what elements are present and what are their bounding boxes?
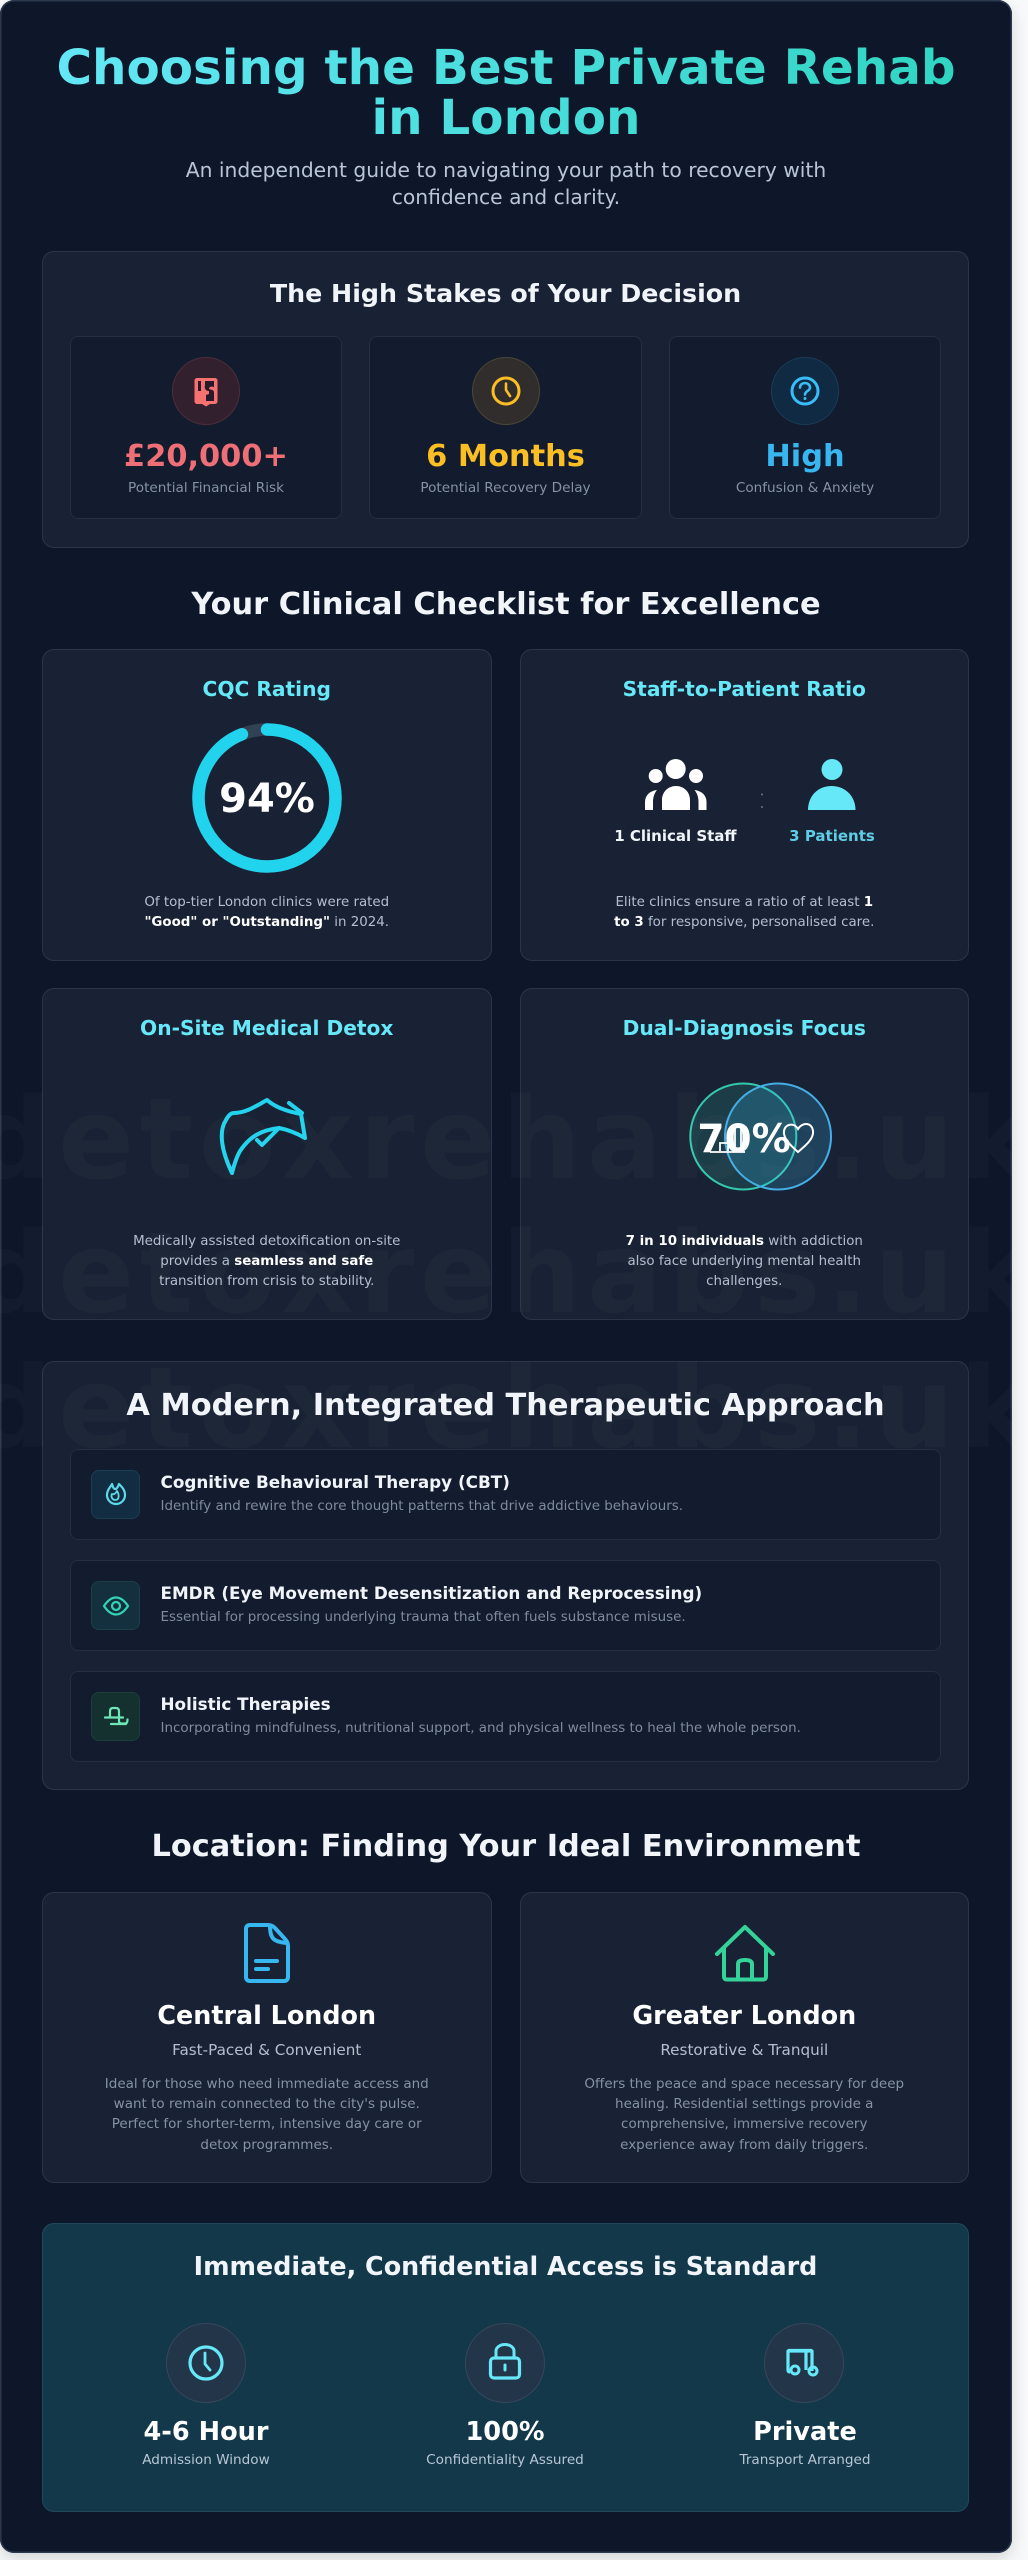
icon: patient xyxy=(808,759,856,810)
icon: holistic xyxy=(91,1692,140,1741)
location title: Greater London xyxy=(632,2000,856,2030)
item description: Essential for processing underlying trauma that often fuels substance misuse. xyxy=(160,1610,686,1625)
card heading: CQC Rating xyxy=(203,677,331,701)
therapy item: CBT xyxy=(70,1449,941,1540)
therapy item: holistic xyxy=(70,1671,941,1762)
subtitle xyxy=(186,158,826,209)
access icon: transport xyxy=(764,2323,844,2403)
icon: detox shape xyxy=(220,1098,307,1175)
location description: comprehensive, immersive recovery xyxy=(621,2116,867,2132)
item title: Holistic Therapies xyxy=(160,1694,331,1714)
heading: location: Location: Finding Your Ideal Environment xyxy=(152,1829,860,1864)
subtitle: An independent guide to navigating your path to recovery with xyxy=(186,158,826,182)
card description: also face underlying mental health xyxy=(627,1254,861,1269)
location description: Perfect for shorter-term, intensive day care or xyxy=(112,2116,422,2132)
card description: "Good" or "Outstanding" in 2024. xyxy=(144,915,389,930)
location description: Offers the peace and space necessary for deep xyxy=(584,2076,904,2092)
card description xyxy=(144,895,389,930)
panel: therapeutic approach xyxy=(42,1361,969,1790)
icon: eye xyxy=(91,1581,140,1630)
panel: central london xyxy=(42,1892,492,2183)
panel: high stakes xyxy=(42,251,969,548)
stat label: Confusion & Anxiety xyxy=(736,480,874,496)
stat value: 6 months: 6 Months xyxy=(426,438,585,474)
venn diagram xyxy=(689,1082,832,1190)
panel: dual diagnosis xyxy=(520,988,969,1320)
label: 3 patients: 3 Patients xyxy=(789,827,875,845)
card description: to 3 for responsive, personalised care. xyxy=(614,915,874,930)
label: 1 clinical staff: 1 Clinical Staff xyxy=(614,827,737,845)
card description xyxy=(626,1234,863,1289)
stat card: confusion xyxy=(669,336,941,519)
heading: therapeutic approach: A Modern, Integrated Therapeutic Approach xyxy=(126,1388,885,1423)
heading: clinical checklist: Your Clinical Checklist for Excellence xyxy=(191,587,821,622)
access label: Transport Arranged xyxy=(740,2452,870,2468)
stat value: high: High xyxy=(765,438,845,474)
card description: transition from crisis to stability. xyxy=(159,1274,374,1289)
venn diagram: 70% xyxy=(697,1117,791,1162)
card description xyxy=(133,1234,400,1289)
title: in London xyxy=(371,90,640,146)
access value: private: Private xyxy=(753,2417,857,2447)
icon: financial risk xyxy=(172,357,240,425)
card heading: Dual-Diagnosis Focus xyxy=(623,1016,866,1040)
icon: clock xyxy=(472,357,540,425)
access value: 4-6 hour: 4-6 Hour xyxy=(144,2417,268,2447)
icon: house xyxy=(714,1924,776,1982)
location description: detox programmes. xyxy=(200,2137,333,2153)
panel: immediate access xyxy=(42,2223,969,2512)
panel: staff ratio xyxy=(520,649,969,961)
ratio dots xyxy=(761,794,763,808)
card description: challenges. xyxy=(706,1274,782,1289)
donut value: 94% xyxy=(219,776,315,822)
card heading: On-Site Medical Detox xyxy=(140,1016,393,1040)
panel: CQC rating xyxy=(42,649,492,961)
card description: Of top-tier London clinics were rated xyxy=(144,895,389,910)
card description xyxy=(614,895,874,930)
item title: Cognitive Behavioural Therapy (CBT) xyxy=(160,1472,510,1492)
location description: experience away from daily triggers. xyxy=(620,2137,868,2153)
access icon: lock xyxy=(465,2323,545,2403)
access label: Admission Window xyxy=(142,2452,270,2468)
card description: provides a seamless and safe xyxy=(160,1254,373,1269)
donut chart: 94% xyxy=(192,723,342,873)
stat label: Potential Recovery Delay xyxy=(420,480,591,496)
heading: high stakes: The High Stakes of Your Decision xyxy=(270,279,741,308)
item title: EMDR (Eye Movement Desensitization and Reprocessing) xyxy=(160,1583,702,1603)
panel: greater london xyxy=(520,1892,969,2183)
card description: Elite clinics ensure a ratio of at least 1 xyxy=(615,895,873,910)
location description: Ideal for those who need immediate access and xyxy=(105,2076,429,2092)
stat value: £20,000+: £20,000+ xyxy=(124,438,288,474)
stat label: Potential Financial Risk xyxy=(128,480,284,496)
icon: flame xyxy=(91,1470,140,1519)
location description: healing. Residential settings provide a xyxy=(615,2096,873,2112)
title: Choosing the Best Private Rehab xyxy=(56,40,956,96)
icon: clinical staff group xyxy=(645,759,706,810)
location subtitle: Fast-Paced & Convenient xyxy=(172,2041,361,2059)
item description: Incorporating mindfulness, nutritional support, and physical wellness to heal the whole person. xyxy=(160,1721,801,1736)
card heading: Staff-to-Patient Ratio xyxy=(623,677,866,701)
icon: document xyxy=(244,1923,290,1983)
location description xyxy=(105,2076,429,2153)
icon: question mark xyxy=(771,357,839,425)
location description: want to remain connected to the city's pulse. xyxy=(114,2096,420,2112)
watermark xyxy=(0,1073,1028,1476)
stat card: recovery delay xyxy=(369,336,642,519)
access label: Confidentiality Assured xyxy=(426,2452,584,2468)
location subtitle: Restorative & Tranquil xyxy=(660,2041,828,2059)
panel: medical detox xyxy=(42,988,492,1320)
title xyxy=(0,43,1012,143)
stat card: financial risk xyxy=(70,336,342,519)
card description: 7 in 10 individuals with addiction xyxy=(626,1234,863,1249)
card description: Medically assisted detoxification on-site xyxy=(133,1234,400,1249)
subtitle: confidence and clarity. xyxy=(392,185,620,209)
access value: 100%: 100% xyxy=(465,2417,545,2447)
heading: immediate access: Immediate, Confidential Access is Standard xyxy=(194,2251,817,2281)
location title: Central London xyxy=(157,2000,376,2030)
therapy item: EMDR xyxy=(70,1560,941,1651)
location description xyxy=(584,2076,904,2153)
item description: Identify and rewire the core thought patterns that drive addictive behaviours. xyxy=(160,1499,683,1514)
access icon: clock xyxy=(166,2323,246,2403)
